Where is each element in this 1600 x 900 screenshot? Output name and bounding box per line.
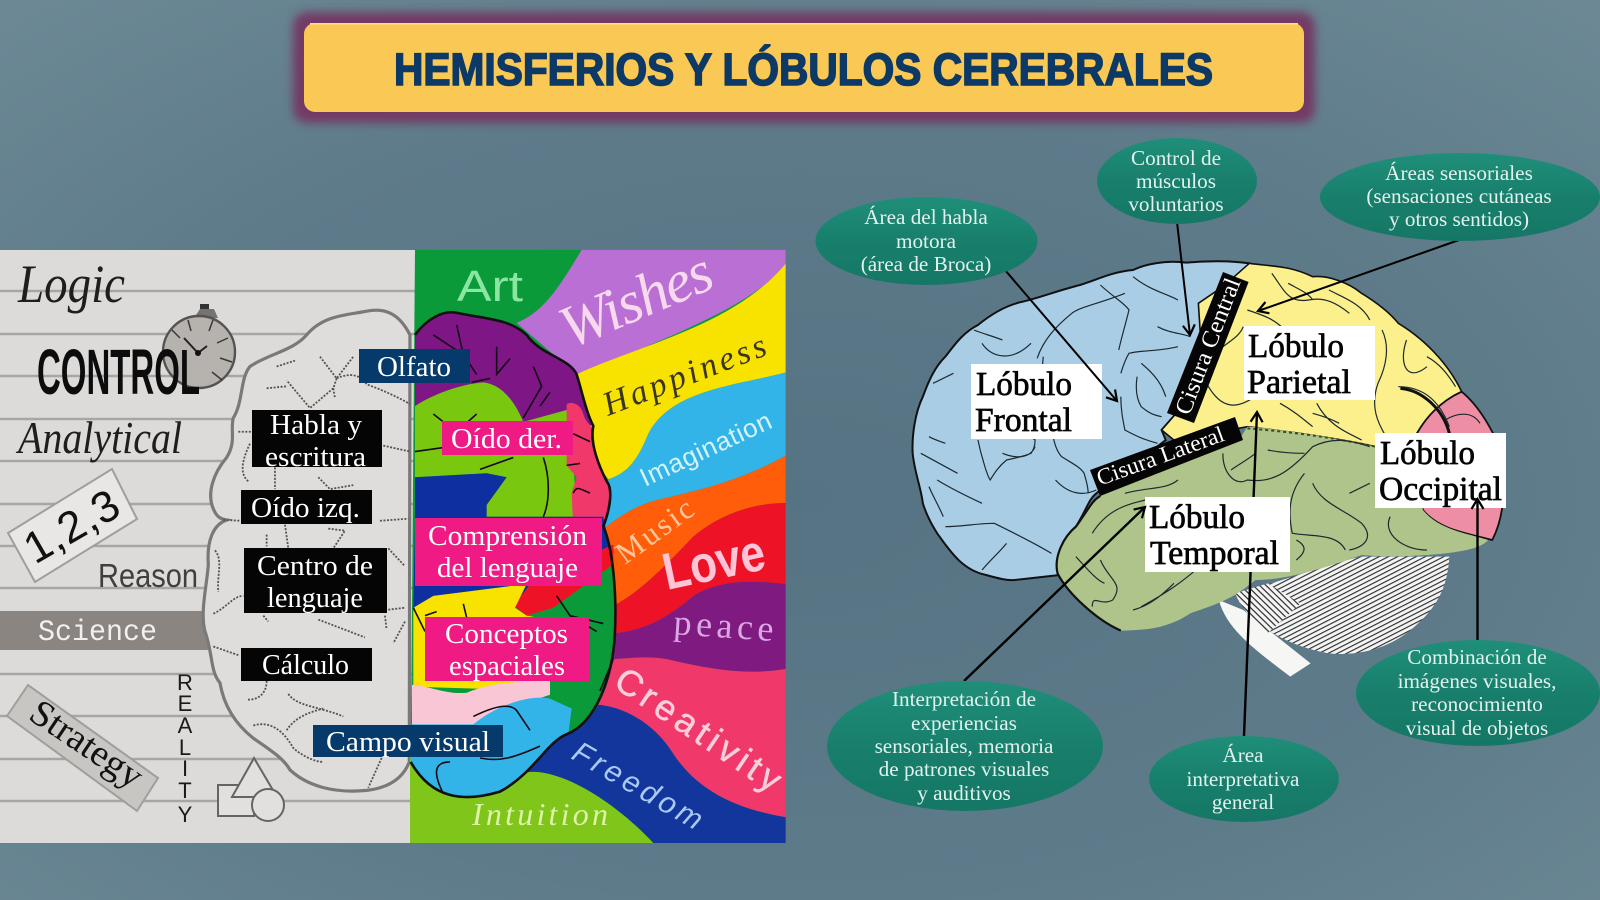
word: Reason: Reason [98, 557, 198, 594]
label: Lóbulo Occipital [1375, 433, 1506, 508]
left brain outline [203, 310, 410, 791]
label: Cálculo: Cálculo [262, 650, 349, 681]
arrow: area interpretativa [1244, 412, 1257, 736]
frontal lobe [913, 261, 1249, 580]
gyri parietal [1207, 273, 1456, 440]
tag: 1,2,3: 1,2,3 [15, 479, 129, 573]
label: Oído izq.: Oído izq. [251, 493, 360, 524]
tag: Strategy [7, 685, 158, 811]
word: REALITY vertical: T [178, 778, 192, 803]
label: Oído der.: Oído der. [451, 424, 562, 455]
arrow: visual combination [1476, 499, 1479, 640]
word: Analytical: Analytical [15, 412, 182, 463]
callout: Área interpretativa: interpretativa [1187, 767, 1300, 791]
label: Lóbulo Parietal: Parietal [1247, 364, 1351, 401]
arrow: interpretation [964, 507, 1145, 681]
callout: Área del habla: motora [896, 229, 957, 253]
stopwatch icon [163, 304, 235, 388]
callout: Combinación [1356, 640, 1600, 746]
label: Conceptos espaciales: Conceptos [445, 619, 568, 650]
word: Peace: peace [672, 602, 775, 649]
word: REALITY vertical: Y [178, 802, 193, 827]
word: REALITY vertical: L [179, 735, 191, 760]
panel: left hemisphere [0, 250, 416, 843]
callout: Control de músculos: voluntarios [1128, 192, 1224, 216]
label: Campo visual: Campo visual [326, 727, 490, 758]
callout: Interpretación: experiencias [911, 711, 1017, 735]
word: Intuition: Intuition [471, 796, 608, 832]
label: Cisura Lateral: Cisura Lateral [1093, 421, 1228, 491]
arrow: muscles [1177, 222, 1190, 335]
callout: Área interpretativa [1149, 736, 1339, 822]
label: Habla y escritura: Habla y [270, 410, 362, 441]
callout: Interpretación: Interpretación de [892, 687, 1036, 711]
label: Cálculo [241, 648, 372, 681]
label: Centro de lenguaje [244, 548, 387, 614]
callout: Área del habla: Área del habla [864, 205, 988, 229]
occipital lobe [1411, 392, 1504, 540]
callout: Área del habla [816, 197, 1038, 285]
label: Lóbulo Frontal [971, 364, 1102, 439]
temporal lobe [1057, 427, 1488, 631]
gyri frontal [921, 277, 1190, 570]
label: Olfato: Olfato [377, 352, 451, 383]
callout: Interpretación: de patrones visuales [879, 757, 1049, 781]
label: Cisura Central: Cisura Central [1171, 274, 1247, 418]
word: Imagination: Imagination [635, 405, 776, 492]
label: Lóbulo Parietal [1244, 326, 1375, 401]
icon: geometric shapes [218, 758, 284, 821]
word: REALITY vertical: E [178, 691, 192, 716]
label: Olfato [359, 349, 470, 383]
callout: Área del habla: (área de Broca) [861, 252, 991, 276]
callout: Áreas sensoriales: (sensaciones cutáneas [1366, 184, 1552, 208]
title text: HEMISFERIOS Y LÓBULOS CEREBRALES [394, 44, 1213, 95]
title banner [293, 12, 1315, 123]
word: REALITY vertical: I [182, 756, 188, 781]
word: CONTROL: CONTROL [37, 336, 200, 408]
word: Music: Music [609, 491, 700, 571]
word: REALITY vertical: A [178, 713, 193, 738]
word: Wishes: Wishes [549, 238, 722, 361]
brain diagram [913, 261, 1504, 677]
word: Art: Art [457, 262, 523, 311]
label: Lóbulo Frontal: Lóbulo [976, 366, 1072, 403]
gyri temporal [1076, 440, 1427, 610]
arrow: sensory areas [1258, 240, 1459, 311]
label: Centro de lenguaje: lenguaje [267, 583, 363, 614]
label: Habla y escritura: escritura [265, 442, 367, 473]
parietal lobe [1162, 263, 1462, 447]
label: Lóbulo Occipital: Lóbulo [1380, 435, 1475, 472]
callout: Interpretación: y auditivos [917, 781, 1011, 805]
callout: Interpretación: sensoriales, memoria [875, 734, 1054, 758]
label: Lóbulo Parietal: Lóbulo [1248, 328, 1344, 365]
label: Comprensión del lenguaje [415, 518, 602, 586]
band: science [0, 611, 208, 650]
label: Comprensión del lenguaje: Comprensión [428, 521, 587, 552]
label: Lóbulo Temporal [1145, 497, 1290, 572]
label: Conceptos espaciales: espaciales [449, 651, 565, 682]
label: Lóbulo Occipital: Occipital [1379, 471, 1502, 508]
callout: Área interpretativa: general [1212, 790, 1274, 814]
label: Lóbulo Temporal: Lóbulo [1149, 499, 1245, 536]
label: Comprensión del lenguaje: del lenguaje [437, 553, 578, 584]
label: Habla y escritura [252, 410, 382, 473]
arrow: Broca to frontal [1005, 270, 1117, 401]
callout: Áreas sensoriales: y otros sentidos) [1389, 207, 1529, 231]
callout: Área interpretativa: Área [1222, 743, 1264, 767]
label: Conceptos espaciales [425, 617, 589, 682]
callout: Control de músculos: Control de [1131, 146, 1221, 170]
word: REALITY vertical [177, 670, 193, 827]
word: Science: Science [38, 616, 157, 650]
label: Centro de lenguaje: Centro de [257, 551, 373, 582]
callout: Combinación: visual de objetos [1406, 716, 1548, 740]
tag: Strategy: Strategy [22, 692, 151, 798]
word: REALITY vertical: R [177, 670, 193, 695]
panel: right hemisphere [410, 238, 790, 843]
brain regions [415, 312, 593, 426]
callout: Áreas sensoriales [1320, 153, 1600, 241]
label: Lóbulo Temporal: Temporal [1150, 535, 1279, 572]
word: Happiness: Happiness [597, 327, 771, 424]
callout: Áreas sensoriales: Áreas sensoriales [1385, 161, 1533, 185]
callout: Interpretación [827, 681, 1103, 811]
callout: Combinación: imágenes visuales, [1398, 669, 1556, 693]
callout: Control de músculos [1097, 138, 1257, 224]
callout: Control de músculos: músculos [1136, 169, 1216, 193]
brain stem [1219, 600, 1311, 677]
word: Creativity: Creativity [608, 659, 790, 800]
cerebellum [1235, 557, 1449, 654]
word: Love: Love [657, 524, 770, 602]
callout: Combinación: reconocimiento [1411, 692, 1543, 716]
label: Lóbulo Frontal: Frontal [975, 402, 1072, 439]
word: Freedom: Freedom [566, 735, 709, 837]
word: Logic: Logic [17, 254, 125, 314]
callout: Combinación: Combinación de [1407, 645, 1547, 669]
